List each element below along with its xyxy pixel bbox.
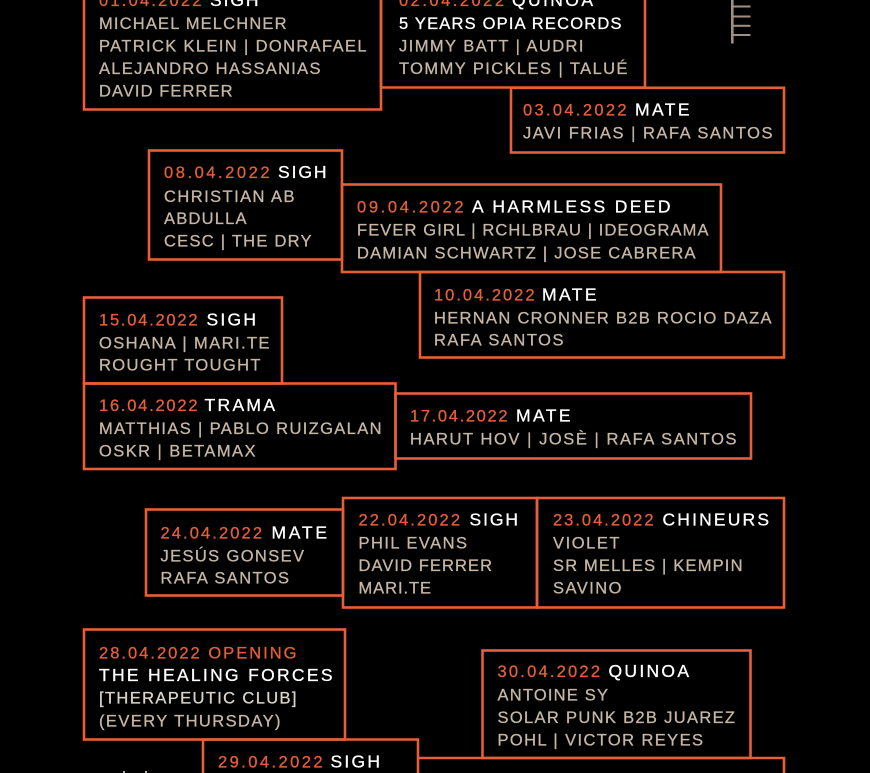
panel: 23.04.2022: CHINEURS <box>662 509 769 529</box>
icon: ladder mark <box>731 0 750 44</box>
panel: 24.04.2022: RAFA SANTOS <box>160 569 289 587</box>
panel: 15.04.2022: OSHANA | MARI.TE <box>99 334 270 352</box>
panel: 01.04.2022: DAVID FERRER <box>99 82 233 100</box>
panel: 22.04.2022: MARI.TE <box>358 579 431 597</box>
panel: 08.04.2022: CHRISTIAN AB <box>164 188 294 206</box>
panel: 30.04.2022: ANTOINE SY <box>498 686 608 704</box>
panel: 15.04.2022: ROUGHT TOUGHT <box>99 356 260 374</box>
panel: 02.04.2022: JIMMY BATT | AUDRI <box>399 37 584 55</box>
panel: 10.04.2022: HERNAN CRONNER B2B ROCIO DAZA <box>434 309 772 327</box>
panel: 08.04.2022: 08.04.2022 <box>164 164 270 182</box>
panel: 01.04.2022 <box>84 0 381 109</box>
panel: 02.04.2022: 5 YEARS OPIA RECORDS <box>399 15 622 33</box>
panel: 09.04.2022: FEVER GIRL | RCHLBRAU | IDEOGRAMA <box>357 221 708 239</box>
panel: 17.04.2022: MATE <box>516 405 570 425</box>
panel: 24.04.2022 <box>146 510 343 596</box>
panel: 23.04.2022 <box>537 498 784 608</box>
panel: 09.04.2022: DAMIAN SCHWARTZ | JOSE CABRERA <box>357 244 696 262</box>
panel: 28.04.2022 opening: 28.04.2022 OPENING <box>99 644 296 662</box>
panel: 24.04.2022: 24.04.2022 <box>160 524 262 542</box>
panel: 22.04.2022 <box>343 498 537 608</box>
panel: 03.04.2022: 03.04.2022 <box>523 101 626 119</box>
panel: 09.04.2022 <box>342 184 721 272</box>
panel: 08.04.2022 <box>149 150 342 260</box>
panel: 03.04.2022: MATE <box>635 99 690 119</box>
panel: 22.04.2022: PHIL EVANS <box>358 534 467 552</box>
panel: 23.04.2022: SR MELLES | KEMPIN <box>553 557 742 575</box>
panel: 08.04.2022: SIGH <box>278 162 326 182</box>
panel: 24.04.2022: JESÚS GONSEV <box>160 546 304 565</box>
panel: 30.04.2022: SOLAR PUNK B2B JUAREZ <box>498 709 735 727</box>
panel: 10.04.2022 <box>420 272 784 358</box>
panel: 01.04.2022: ALEJANDRO HASSANIAS <box>99 60 320 78</box>
panel: 02.04.2022: TOMMY PICKLES | TALUÉ <box>399 59 628 78</box>
panel: 28.04.2022 opening: [THERAPEUTIC CLUB] <box>99 689 296 707</box>
panel: 30.04.2022: POHL | VICTOR REYES <box>498 731 703 749</box>
panel: 16.04.2022: TRAMA <box>204 395 275 415</box>
panel: 01.04.2022: MICHAEL MELCHNER <box>99 15 287 33</box>
panel: 09.04.2022: A HARMLESS DEED <box>472 196 670 216</box>
panel: 15.04.2022: 15.04.2022 <box>99 311 198 329</box>
panel: 28.04.2022 opening <box>84 630 345 740</box>
panel: 16.04.2022: OSKR | BETAMAX <box>99 442 256 460</box>
panel: 02.04.2022 <box>381 0 645 87</box>
panel: 15.04.2022 <box>84 298 282 384</box>
panel: 17.04.2022: 17.04.2022 <box>410 407 508 425</box>
panel: 29.04.2022: SIGH <box>330 751 380 771</box>
panel: 10.04.2022: MATE <box>542 284 596 304</box>
panel: 28.04.2022 opening: THE HEALING FORCES <box>99 665 332 685</box>
panel: 24.04.2022: MATE <box>272 522 327 542</box>
panel: 10.04.2022: 10.04.2022 <box>434 286 534 304</box>
panel: 30.04.2022: QUINOA <box>608 661 689 681</box>
panel: 28.04.2022 opening: (EVERY THURSDAY) <box>99 712 280 730</box>
panel: 08.04.2022: ABDULLA <box>164 210 246 228</box>
panel: 16.04.2022: 16.04.2022 <box>99 397 198 415</box>
panel: 30.04.2022 <box>482 650 750 758</box>
panel: 10.04.2022: RAFA SANTOS <box>434 331 564 349</box>
panel: 01.04.2022: PATRICK KLEIN | DONRAFAEL <box>99 37 366 55</box>
panel: cropped bottom box <box>418 758 784 773</box>
panel: 16.04.2022: MATTHIAS | PABLO RUIZGALAN <box>99 420 382 438</box>
panel: 08.04.2022: CESC | THE DRY <box>164 232 312 250</box>
panel: 22.04.2022: SIGH <box>470 509 518 529</box>
panel: 29.04.2022 <box>203 740 418 773</box>
panel: 03.04.2022: JAVI FRIAS | RAFA SANTOS <box>523 124 772 142</box>
panel: 23.04.2022: SAVINO <box>553 579 622 597</box>
panel: 03.04.2022 <box>511 88 784 152</box>
panel: 17.04.2022 <box>396 394 751 458</box>
panel: 17.04.2022: HARUT HOV | JOSÈ | RAFA SANTOS <box>410 429 736 448</box>
panel: 29.04.2022: 29.04.2022 <box>218 753 322 771</box>
panel: 22.04.2022: DAVID FERRER <box>358 557 492 575</box>
icon: cropped bottom marks <box>123 771 147 773</box>
panel: 23.04.2022: VIOLET <box>553 534 620 552</box>
panel: 15.04.2022: SIGH <box>206 309 256 329</box>
panel: 22.04.2022: 22.04.2022 <box>358 511 460 529</box>
panel: 23.04.2022: 23.04.2022 <box>553 511 654 529</box>
panel: 16.04.2022 <box>84 384 396 469</box>
panel: 30.04.2022: 30.04.2022 <box>498 663 600 681</box>
panel: 09.04.2022: 09.04.2022 <box>357 198 464 216</box>
